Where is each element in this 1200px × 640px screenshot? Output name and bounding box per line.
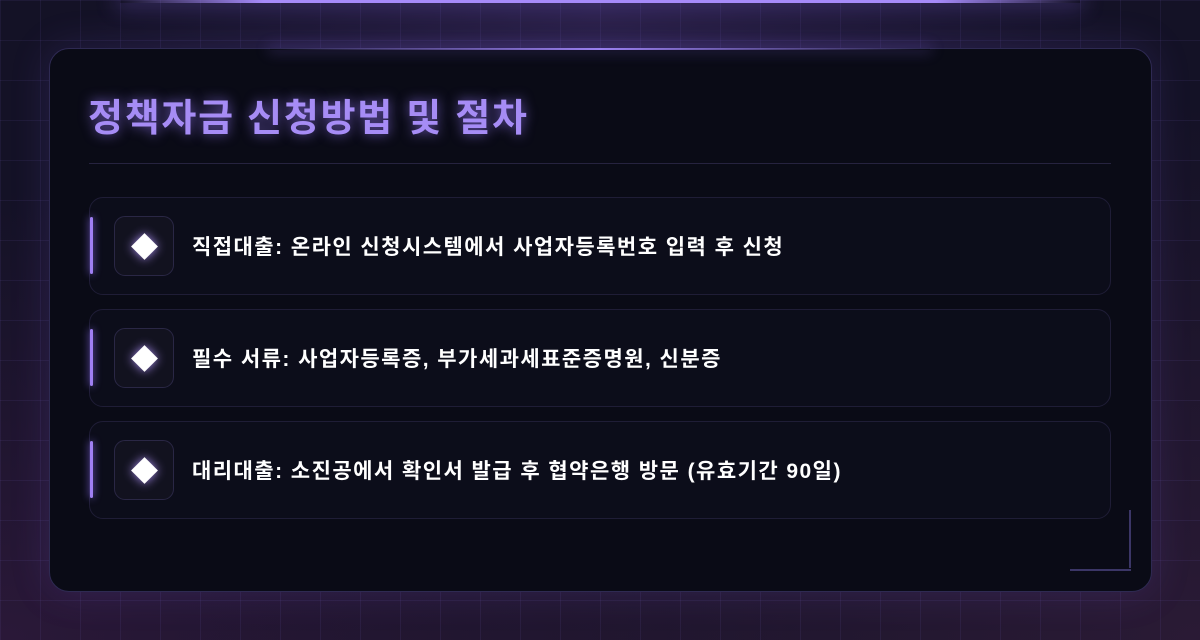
title: 정책자금 신청방법 및 절차	[88, 98, 529, 140]
item: required documents	[89, 309, 1111, 407]
icon: diamond	[114, 328, 174, 388]
item: agency loan	[89, 421, 1111, 519]
text: agency loan: 대리대출: 소진공에서 확인서 발급 후 협약은행 방문 (유효기간 90일)	[192, 460, 842, 483]
icon: diamond	[114, 440, 174, 500]
item: direct loan	[89, 197, 1111, 295]
text: documents: 필수 서류: 사업자등록증, 부가세과세표준증명원, 신분증	[192, 348, 722, 371]
icon: diamond	[114, 216, 174, 276]
text: direct loan: 직접대출: 온라인 신청시스템에서 사업자등록번호 입력 후 신청	[192, 236, 784, 259]
panel: main card	[49, 48, 1152, 592]
